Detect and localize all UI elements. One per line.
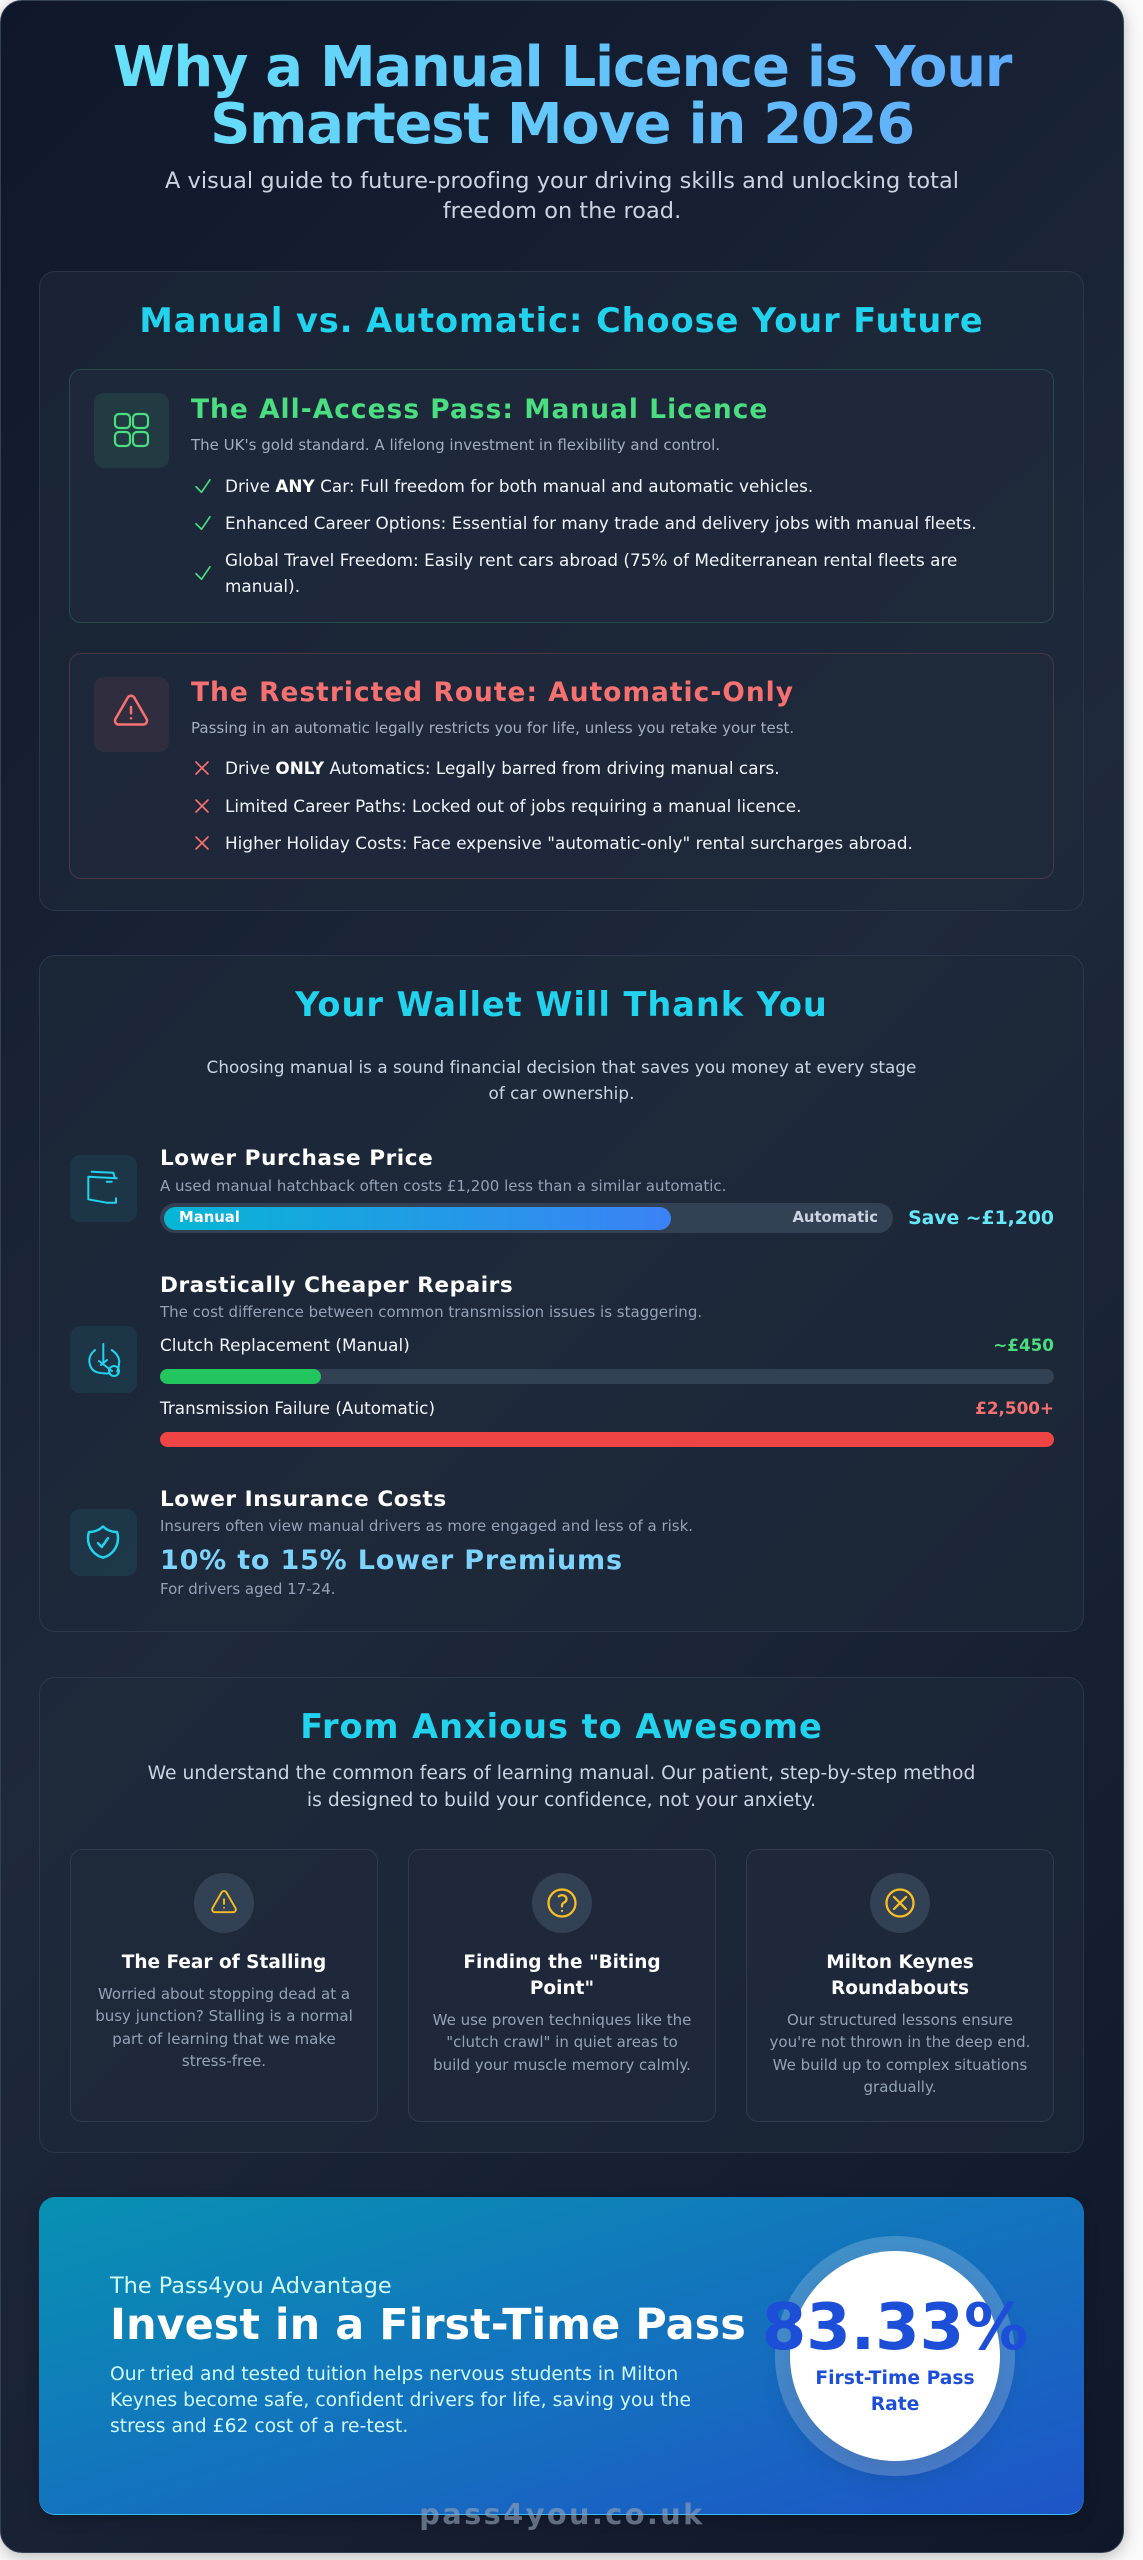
heading: repairs: Drastically Cheaper Repairs [160, 1273, 513, 1298]
label: clutch: Clutch Replacement (Manual) [160, 1335, 410, 1355]
text: age note: For drivers aged 17-24. [160, 1580, 336, 1598]
text: anxious intro: is designed to build your confidence, not your anxiety. [307, 1790, 816, 1811]
text: anxious intro: We understand the common fears of learning manual. Our patient, step-by-step method [148, 1763, 975, 1784]
text: tuition: Keynes become safe, confident drivers for life, saving you the [110, 2390, 691, 2411]
text: roundabouts: We build up to complex situations [773, 2056, 1027, 2074]
value: save: Save ~£1,200 [908, 1208, 1054, 1229]
text: wallet intro: of car ownership. [488, 1083, 634, 1103]
bar label: manual: Manual [179, 1209, 240, 1226]
stat label [815, 2368, 975, 2415]
text: tuition: stress and £62 cost of a re-test. [110, 2416, 408, 2437]
text: insurance: Insurers often view manual drivers as more engaged and less of a risk. [160, 1517, 693, 1535]
text: repairs: The cost difference between common transmission issues is staggering. [160, 1303, 702, 1321]
panel: anxious to awesome [39, 1677, 1084, 2153]
text: biting point [433, 2011, 691, 2074]
card: biting point [408, 1849, 716, 2122]
card: stalling [70, 1849, 378, 2122]
title [0, 39, 1124, 153]
callout: pass4you advantage [39, 2197, 1084, 2515]
text: advantage: The Pass4you Advantage [110, 2273, 392, 2299]
text: purchase price: A used manual hatchback often costs £1,200 less than a similar automatic. [160, 1177, 726, 1195]
bar fill: manual [164, 1207, 671, 1230]
heading: roundabouts: Roundabouts [831, 1978, 969, 1999]
card: automatic only [69, 653, 1054, 879]
text: wallet intro: Choosing manual is a sound financial decision that saves you money at every stage [207, 1057, 916, 1077]
icon: shield [70, 1509, 137, 1576]
bar fill: clutch [160, 1369, 321, 1384]
list item: career options: Enhanced Career Options: Essential for many trade and delivery jobs with manual fleets. [225, 513, 977, 533]
list item: drive any car: Drive ANY Car: Full freedom for both manual and automatic vehicles. [225, 476, 813, 496]
icon: wallet [70, 1155, 137, 1222]
title: Why a Manual Licence is Your [113, 35, 1011, 100]
heading: roundabouts [826, 1952, 974, 1999]
text: stalling: busy junction? Stalling is a normal [95, 2007, 353, 2025]
heading: purchase price: Lower Purchase Price [160, 1146, 433, 1171]
text: stalling: Worried about stopping dead at a [98, 1985, 350, 2003]
bar: transmission [160, 1432, 1054, 1447]
stat circle: pass rate [790, 2251, 1000, 2461]
text: stalling [95, 1985, 353, 2070]
stat label: Rate [871, 2394, 919, 2415]
text: biting point: We use proven techniques like the [433, 2011, 691, 2029]
icon: warning triangle [94, 677, 169, 752]
card: manual licence [69, 369, 1054, 623]
heading: biting point: Point" [530, 1978, 594, 1999]
list item: global travel: manual). [225, 576, 300, 596]
heading: restricted route: The Restricted Route: Automatic-Only [191, 677, 794, 708]
value: transmission: £2,500+ [975, 1398, 1054, 1418]
label: transmission: Transmission Failure (Automatic) [160, 1398, 435, 1418]
icon: all-access grid [94, 393, 169, 468]
text: automatic description: Passing in an automatic legally restricts you for life, unless you retake your test. [191, 719, 794, 737]
heading: wallet: Your Wallet Will Thank You [295, 985, 828, 1024]
heading: anxious: From Anxious to Awesome [300, 1707, 823, 1746]
bar chart: purchase price [160, 1203, 893, 1233]
icon: stalling warning [194, 1873, 254, 1933]
heading: manual vs automatic: Manual vs. Automatic: Choose Your Future [139, 301, 984, 340]
text: roundabouts [770, 2011, 1030, 2096]
text: roundabouts: Our structured lessons ensure [787, 2011, 1013, 2029]
text: tuition [110, 2364, 691, 2437]
heading: stalling: The Fear of Stalling [122, 1952, 326, 1973]
text: roundabouts: you're not thrown in the deep end. [770, 2033, 1030, 2051]
heading: insurance: Lower Insurance Costs [160, 1487, 447, 1512]
list item: limited career: Limited Career Paths: Locked out of jobs requiring a manual licence. [225, 796, 801, 816]
icon: question [532, 1873, 592, 1933]
text: wallet intro [207, 1057, 916, 1103]
text: biting point: build your muscle memory calmly. [433, 2056, 691, 2074]
value: clutch: ~£450 [993, 1335, 1054, 1355]
text: anxious intro [148, 1763, 975, 1811]
heading: invest: Invest in a First-Time Pass [110, 2300, 746, 2350]
icon: wrench [70, 1326, 137, 1393]
text: biting point: "clutch crawl" in quiet areas to [446, 2033, 678, 2051]
bar: clutch [160, 1369, 1054, 1384]
heading: roundabouts: Milton Keynes [826, 1952, 974, 1973]
title: Smartest Move in 2026 [210, 92, 914, 157]
stat: 83.33%: 83.33% [762, 2291, 1028, 2365]
text: stalling: stress-free. [182, 2052, 266, 2070]
subtitle [165, 168, 959, 224]
icon: x circle [870, 1873, 930, 1933]
list item: holiday costs: Higher Holiday Costs: Face expensive "automatic-only" rental surcharges abroad. [225, 833, 913, 853]
text: roundabouts: gradually. [864, 2078, 936, 2096]
text: manual description: The UK's gold standard. A lifelong investment in flexibility and control. [191, 436, 720, 454]
text: stalling: part of learning that we make [112, 2030, 336, 2048]
heading: biting point: Finding the "Biting [463, 1952, 661, 1973]
card: roundabouts [746, 1849, 1054, 2122]
heading: manual licence: The All-Access Pass: Manual Licence [191, 394, 768, 425]
bar label: automatic: Automatic [792, 1209, 878, 1226]
text: tuition: Our tried and tested tuition helps nervous students in Milton [110, 2364, 678, 2385]
stat label: First-Time Pass [815, 2368, 975, 2389]
footer: website: pass4you.co.uk [419, 2497, 705, 2531]
panel: manual vs automatic [39, 271, 1084, 911]
list item: drive only automatics: Drive ONLY Automatics: Legally barred from driving manual cars. [225, 758, 780, 778]
panel: wallet [39, 955, 1084, 1632]
subtitle: A visual guide to future-proofing your driving skills and unlocking total [165, 168, 959, 194]
subtitle: freedom on the road. [443, 198, 681, 224]
list item: global travel: Global Travel Freedom: Easily rent cars abroad (75% of Mediterranean rental fleets are [225, 550, 957, 570]
list item: global travel [195, 550, 957, 596]
heading: biting point [463, 1952, 661, 1999]
stat: premiums: 10% to 15% Lower Premiums [160, 1545, 623, 1576]
